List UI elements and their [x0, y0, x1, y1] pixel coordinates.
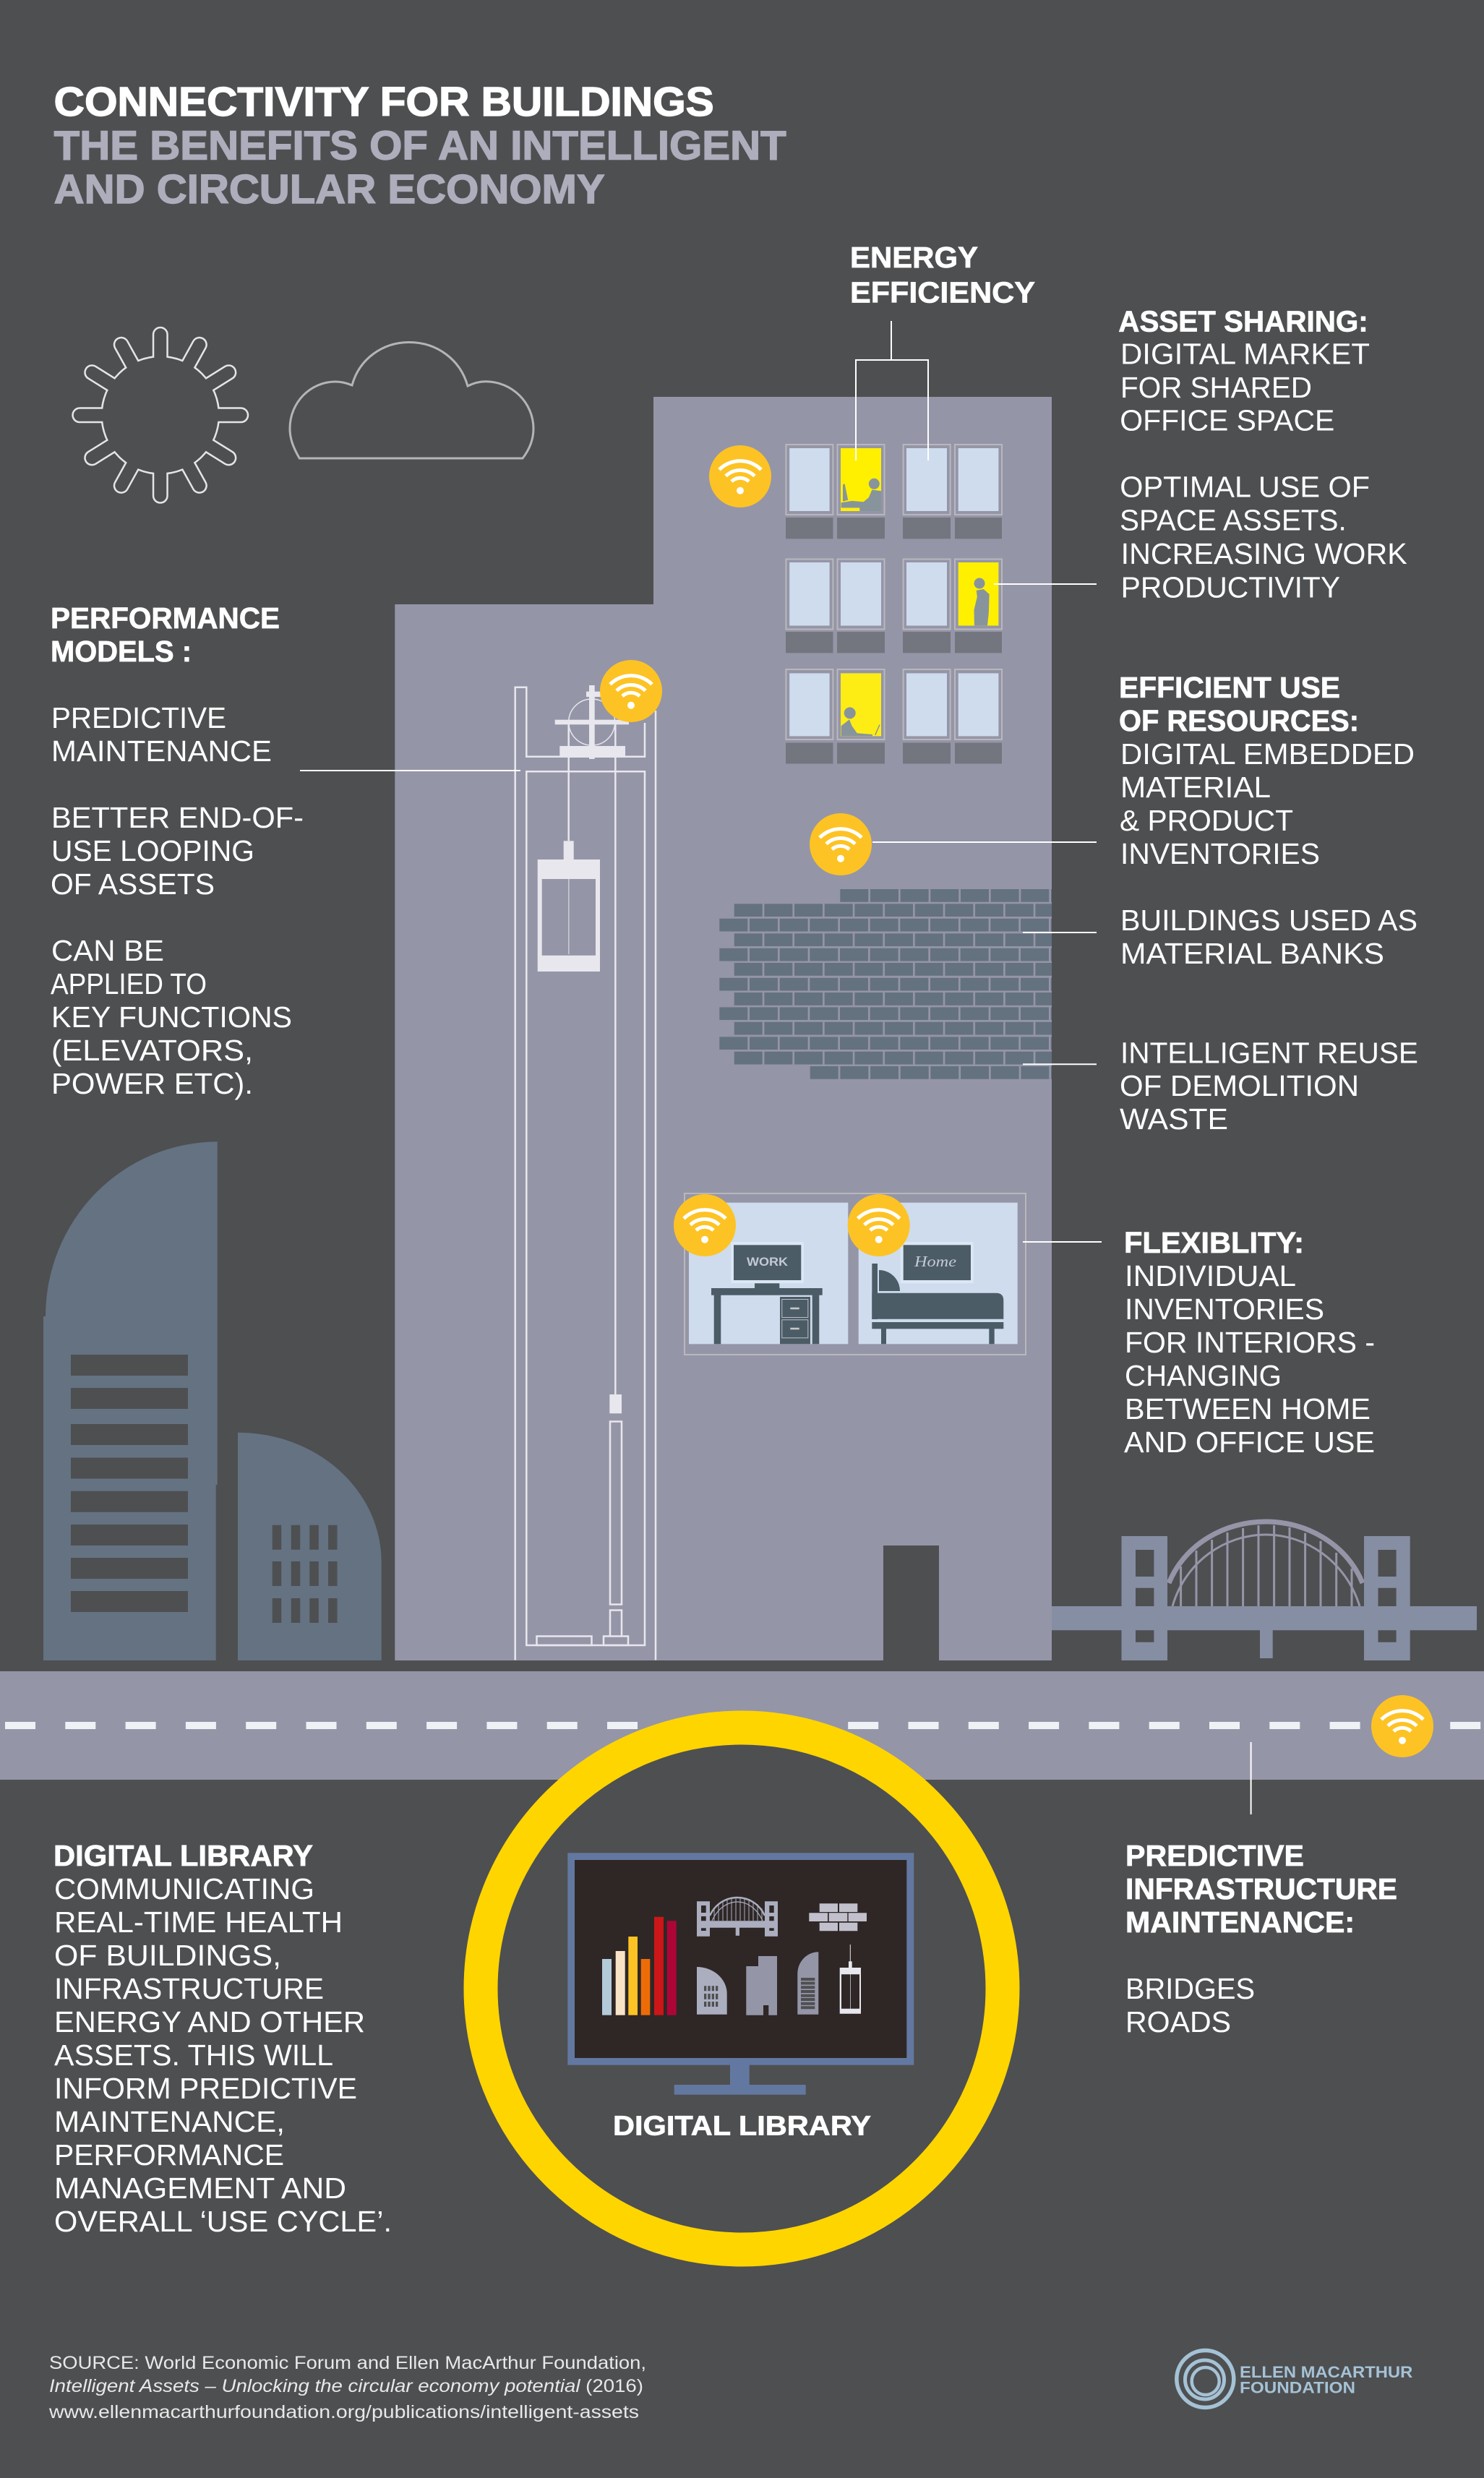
text: efficient use of resources: MATERIAL	[1120, 771, 1271, 804]
text: digital library description: ASSETS. THIS WILL	[54, 2038, 333, 2072]
text: digital library description	[53, 1839, 392, 2238]
room window: work and home	[685, 1193, 1026, 1355]
text: performance models: MODELS :	[51, 635, 192, 668]
logo: ellen macarthur foundation: FOUNDATION	[1240, 2379, 1355, 2397]
logo: ellen macarthur foundation: ELLEN MACARTHUR	[1240, 2363, 1412, 2381]
wall of bricks	[719, 896, 1052, 1073]
windows	[786, 445, 1002, 763]
text: predictive infrastructure maintenance	[1125, 1839, 1397, 2038]
icon: wifi on upper wall	[709, 445, 771, 507]
text: performance models: CAN BE	[51, 934, 164, 967]
text: digital library description: MAINTENANCE,	[54, 2105, 285, 2138]
mini bridge	[697, 1898, 778, 1937]
text: performance models: OF ASSETS	[51, 867, 215, 901]
mini curved building	[697, 1967, 727, 2015]
text: asset sharing: ASSET SHARING:	[1118, 304, 1368, 338]
text: efficient use of resources: INVENTORIES	[1120, 837, 1320, 870]
text: performance models: BETTER END-OF-	[51, 801, 304, 834]
text: digital library description: COMMUNICATING	[54, 1872, 314, 1905]
text: digital library description: REAL-TIME HEALTH	[54, 1905, 343, 1939]
person at computer	[841, 479, 881, 511]
text: efficient use of resources: OF RESOURCES:	[1119, 704, 1359, 737]
text: digital library description: DIGITAL LIBRARY	[53, 1839, 313, 1872]
bed with home picture: Home	[914, 1253, 956, 1270]
icon: wifi on home room	[848, 1194, 910, 1256]
source text	[48, 2353, 646, 2422]
text: digital library description: OF BUILDINGS,	[54, 1939, 281, 1972]
text: flexibility: CHANGING	[1125, 1359, 1282, 1392]
icon: wifi on road	[1371, 1695, 1433, 1757]
text: performance models: (ELEVATORS,	[51, 1034, 253, 1067]
text: energy efficiency: ENERGY	[850, 241, 978, 274]
text: performance models: POWER ETC).	[51, 1067, 253, 1100]
text: efficient use of resources: EFFICIENT USE	[1119, 671, 1340, 704]
text: asset sharing: OPTIMAL USE OF	[1120, 470, 1370, 503]
text: digital library description: ENERGY AND OTHER	[54, 2005, 365, 2038]
icon: sun	[74, 328, 247, 502]
logo: ellen macarthur foundation	[1177, 2351, 1412, 2407]
bed with home picture	[872, 1242, 1003, 1344]
icon: wifi on elevator	[600, 660, 662, 722]
left background tall building	[43, 1141, 218, 1660]
text: efficient use of resources	[1119, 671, 1415, 870]
text: predictive infrastructure maintenance: PREDICTIVE	[1125, 1839, 1304, 1872]
text: demolition waste	[1120, 1037, 1418, 1136]
text: predictive infrastructure maintenance: BRIDGES	[1125, 1972, 1255, 2005]
source text: Intelligent Assets – Unlocking the circular economy potential (2016)	[49, 2376, 643, 2396]
text: energy efficiency	[850, 241, 1035, 309]
text: flexibility: FLEXIBLITY:	[1124, 1226, 1304, 1259]
elevator machinery and car	[538, 685, 629, 1413]
text: efficient use of resources: DIGITAL EMBEDDED	[1120, 737, 1415, 771]
door	[883, 1545, 939, 1660]
text: digital library description: INFRASTRUCTURE	[54, 1972, 324, 2005]
source text: www.ellenmacarthurfoundation.org/publications/intelligent-assets	[48, 2402, 639, 2422]
left background small building	[238, 1433, 382, 1660]
text: demolition waste: OF DEMOLITION	[1120, 1069, 1359, 1102]
text: digital library description: OVERALL ‘USE CYCLE’.	[54, 2205, 392, 2238]
text: flexibility: INVENTORIES	[1125, 1292, 1324, 1326]
text: predictive infrastructure maintenance: MAINTENANCE:	[1125, 1905, 1355, 1939]
text: material banks	[1120, 904, 1417, 970]
text: material banks: MATERIAL BANKS	[1120, 937, 1384, 970]
text: demolition waste: INTELLIGENT REUSE	[1120, 1037, 1418, 1070]
main building	[395, 397, 1052, 1660]
text: asset sharing: PRODUCTIVITY	[1121, 571, 1340, 604]
text: asset sharing: INCREASING WORK	[1121, 537, 1407, 570]
mini bricks	[809, 1903, 867, 1931]
text: flexibility: FOR INTERIORS -	[1125, 1326, 1375, 1359]
text: performance models: PERFORMANCE	[51, 601, 280, 635]
text: performance models: KEY FUNCTIONS	[51, 1000, 292, 1034]
text: asset sharing	[1118, 304, 1407, 604]
source text: SOURCE: World Economic Forum and Ellen MacArthur Foundation,	[49, 2353, 646, 2373]
text: material banks: BUILDINGS USED AS	[1120, 904, 1417, 937]
monitor: digital library	[567, 1853, 914, 2095]
title: THE BENEFITS OF AN INTELLIGENT	[54, 123, 786, 169]
bar chart	[602, 1917, 677, 2015]
road	[0, 1671, 1484, 1780]
text: performance models: PREDICTIVE	[51, 701, 226, 734]
text: demolition waste: WASTE	[1120, 1102, 1228, 1136]
text: energy efficiency: EFFICIENCY	[850, 276, 1035, 309]
work desk with monitor	[711, 1242, 823, 1344]
text: flexibility: BETWEEN HOME	[1125, 1392, 1371, 1426]
mini elevator	[840, 1945, 861, 2014]
connector lines	[300, 321, 1251, 1814]
text: flexibility: AND OFFICE USE	[1124, 1426, 1375, 1459]
text: asset sharing: DIGITAL MARKET	[1120, 337, 1370, 370]
mini tower	[797, 1952, 818, 2015]
yellow ring	[481, 1728, 1003, 2250]
title	[54, 79, 786, 213]
text: performance models: USE LOOPING	[51, 834, 254, 867]
text: predictive infrastructure maintenance: INFRASTRUCTURE	[1125, 1872, 1397, 1905]
elevator shaft	[515, 687, 656, 1660]
icon: wifi on work room	[674, 1194, 736, 1256]
title: AND CIRCULAR ECONOMY	[54, 166, 605, 213]
label: digital library: DIGITAL LIBRARY	[613, 2111, 871, 2141]
bridge	[1052, 1522, 1477, 1660]
work desk with monitor: WORK	[747, 1255, 789, 1269]
text: asset sharing: FOR SHARED	[1120, 371, 1312, 404]
title: CONNECTIVITY FOR BUILDINGS	[54, 79, 714, 125]
text: performance models	[51, 601, 304, 1100]
text: asset sharing: OFFICE SPACE	[1120, 404, 1334, 437]
text: digital library description: MANAGEMENT AND	[54, 2172, 346, 2205]
icon: wifi by bricks	[810, 813, 872, 875]
text: digital library description: PERFORMANCE	[54, 2138, 284, 2172]
text: predictive infrastructure maintenance: ROADS	[1125, 2005, 1231, 2038]
text: flexibility: INDIVIDUAL	[1125, 1259, 1296, 1292]
text: efficient use of resources: & PRODUCT	[1120, 804, 1293, 837]
text: flexibility	[1124, 1226, 1375, 1459]
text: digital library description: INFORM PREDICTIVE	[54, 2072, 357, 2105]
person with laptop	[841, 707, 880, 736]
text: asset sharing: SPACE ASSETS.	[1120, 503, 1347, 536]
standing person	[974, 578, 990, 625]
text: performance models: APPLIED TO	[51, 967, 207, 1000]
icon: cloud	[290, 343, 533, 458]
text: performance models: MAINTENANCE	[51, 734, 272, 768]
mini office building	[746, 1956, 777, 2015]
